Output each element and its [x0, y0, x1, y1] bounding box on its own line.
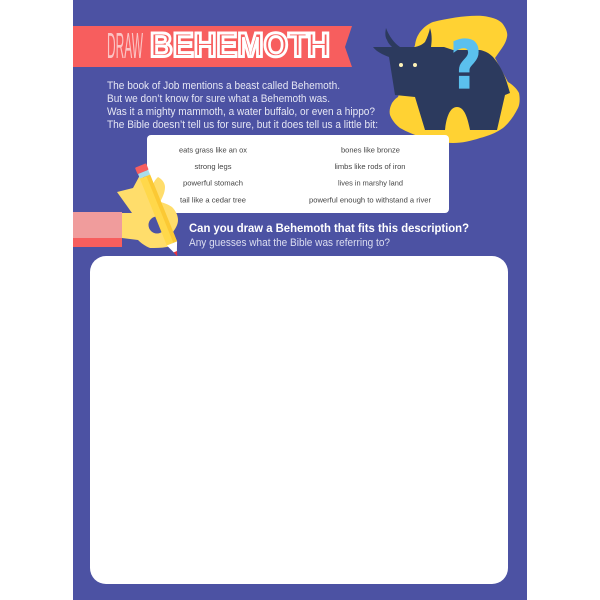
- hand: [117, 175, 178, 248]
- traits: right column: bones like bronze: [341, 146, 400, 154]
- traits: left column: tail like a cedar tree: [180, 196, 246, 204]
- title banner: DRAW: [107, 25, 143, 66]
- heading: drawing prompt: Can you draw a Behemoth that fits this description?: [189, 221, 469, 235]
- bull body: [373, 28, 510, 130]
- intro paragraph: The Bible doesn’t tell us for sure, but it does tell us a little bit:: [107, 119, 378, 131]
- traits: left column: powerful stomach: [183, 178, 243, 188]
- card: behemoth traits: [147, 135, 449, 213]
- intro paragraph: [107, 80, 378, 131]
- traits: left column: eats grass like an ox: [179, 146, 247, 154]
- title banner: [73, 25, 352, 67]
- traits: right column: [309, 146, 432, 204]
- purple page background: [73, 0, 527, 600]
- sleeve: [73, 212, 122, 238]
- sleeve cuff: [73, 238, 122, 247]
- icon: behemoth silhouette with question mark: [373, 16, 520, 143]
- intro paragraph: Was it a mighty mammoth, a water buffalo, or even a hippo?: [107, 106, 375, 118]
- traits: left column: strong legs: [194, 162, 232, 171]
- traits: right column: powerful enough to withstand a river: [309, 196, 432, 204]
- bull eyes: [399, 63, 417, 67]
- intro paragraph: But we don’t know for sure what a Behemoth was.: [107, 93, 330, 105]
- intro paragraph: The book of Job mentions a beast called Behemoth.: [107, 80, 340, 92]
- hand gap: [148, 216, 166, 234]
- panel: blank drawing area: [90, 256, 508, 584]
- icon: hand holding pencil: [73, 163, 183, 259]
- yellow blob: [390, 16, 520, 143]
- traits: right column: lives in marshy land: [338, 178, 403, 188]
- traits: left column: [179, 146, 247, 204]
- card background: [147, 135, 449, 213]
- banner ribbon: [73, 26, 352, 67]
- subheading: prompt question: Any guesses what the Bible was referring to?: [189, 237, 390, 249]
- question mark: ?: [450, 28, 482, 104]
- pencil: [135, 163, 183, 259]
- title word: behemoth: BEHEMOTH: [150, 26, 330, 64]
- traits: right column: limbs like rods of iron: [334, 162, 406, 171]
